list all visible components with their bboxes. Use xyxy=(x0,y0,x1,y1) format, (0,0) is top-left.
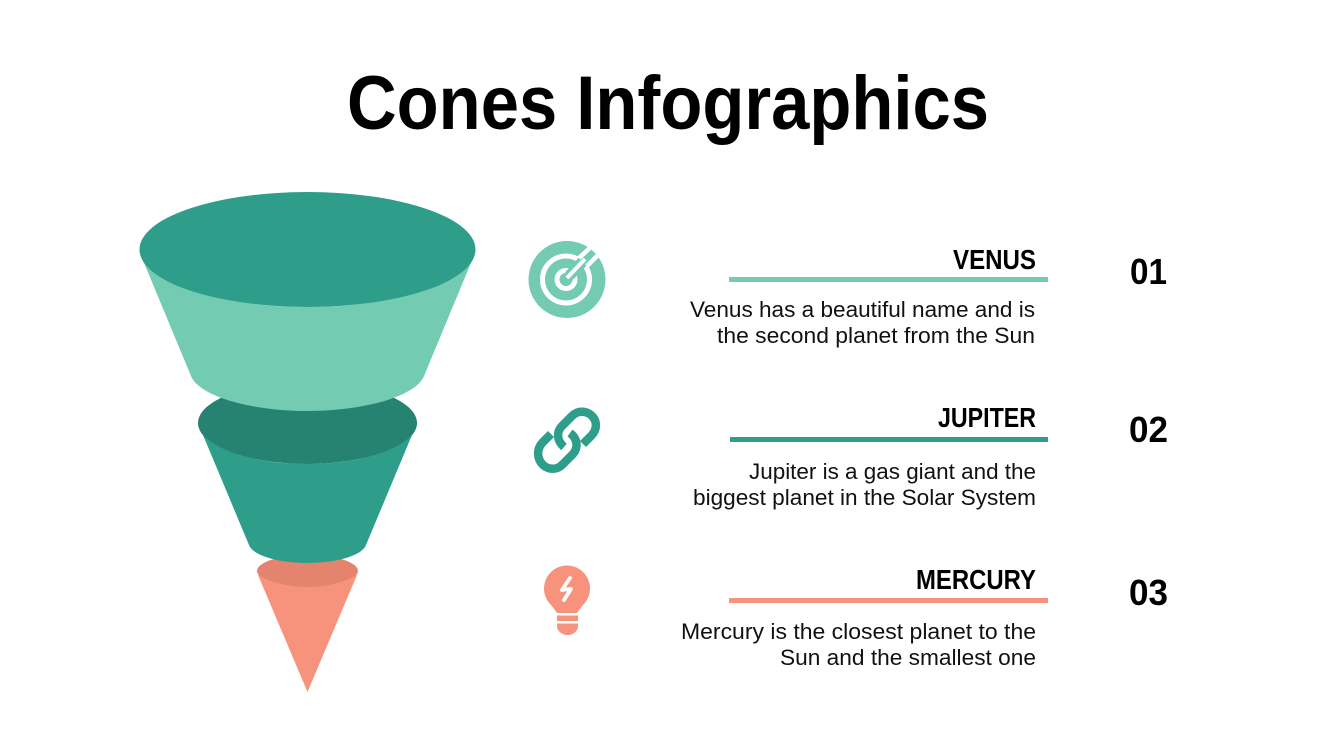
number: 02: 02 xyxy=(1129,409,1168,450)
panel: Venus xyxy=(690,244,1048,348)
cone: top xyxy=(140,192,476,411)
text: Jupiter description: Jupiter is a gas giant and the xyxy=(749,459,1036,484)
text: Venus description xyxy=(690,297,1035,348)
heading: Venus: VENUS xyxy=(953,244,1036,275)
cone funnel xyxy=(140,192,476,692)
icon: chain link xyxy=(538,412,596,469)
heading: Mercury: MERCURY xyxy=(916,564,1036,595)
icon: target xyxy=(528,241,606,318)
cone: middle xyxy=(198,382,417,563)
title: Cones Infographics xyxy=(347,61,989,146)
panel: Mercury xyxy=(681,564,1048,670)
cone: bottom tip xyxy=(257,555,358,692)
number: 03: 03 xyxy=(1129,572,1168,613)
text: Mercury description: Sun and the smallest one xyxy=(780,645,1036,670)
icon: light bulb xyxy=(544,566,590,635)
text: Mercury description: Mercury is the closest planet to the xyxy=(681,619,1036,644)
text: Mercury description xyxy=(681,619,1036,670)
heading: Jupiter: JUPITER xyxy=(938,402,1036,433)
text: Venus description: Venus has a beautiful name and is xyxy=(690,297,1035,322)
panel: Jupiter xyxy=(693,402,1048,510)
number: 01: 01 xyxy=(1130,251,1167,292)
text: Jupiter description: biggest planet in the Solar System xyxy=(693,485,1036,510)
text: Venus description: the second planet from the Sun xyxy=(717,323,1035,348)
text: Jupiter description xyxy=(693,459,1036,510)
